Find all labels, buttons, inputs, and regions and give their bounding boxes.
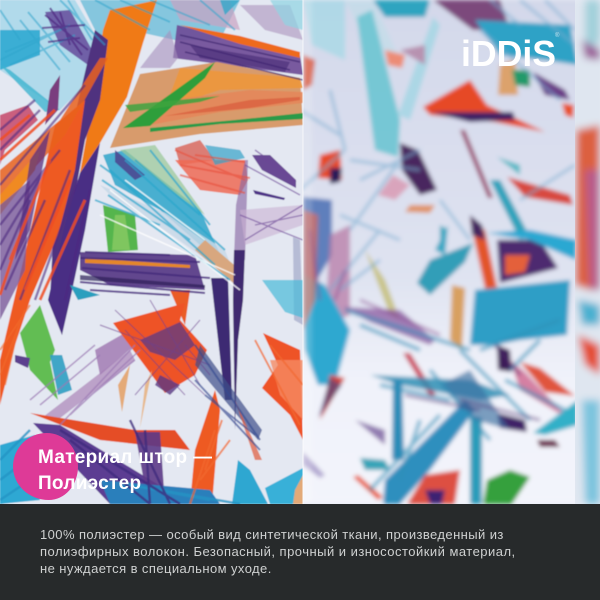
- fold highlight between panels: [302, 0, 304, 504]
- description text: [40, 527, 516, 576]
- left curtain panel in focus: [0, 0, 303, 504]
- pink badge blob: [13, 433, 78, 500]
- description text: не нуждается в специальном уходе.: [40, 561, 272, 576]
- right curtain fold strongly blurred: [575, 0, 600, 504]
- heading: Полиэстер: [38, 473, 141, 494]
- heading: [38, 447, 212, 494]
- logo: IDDIS: ®: [555, 32, 560, 39]
- heading: Материал штор —: [38, 447, 212, 468]
- description text: 100% полиэстер — особый вид синтетической ткани, произведенный из: [40, 527, 504, 542]
- central curtain panel out of focus: [298, 0, 580, 504]
- description panel: [0, 504, 600, 600]
- description text: полиэфирных волокон. Безопасный, прочный и износостойкий материал,: [40, 544, 516, 559]
